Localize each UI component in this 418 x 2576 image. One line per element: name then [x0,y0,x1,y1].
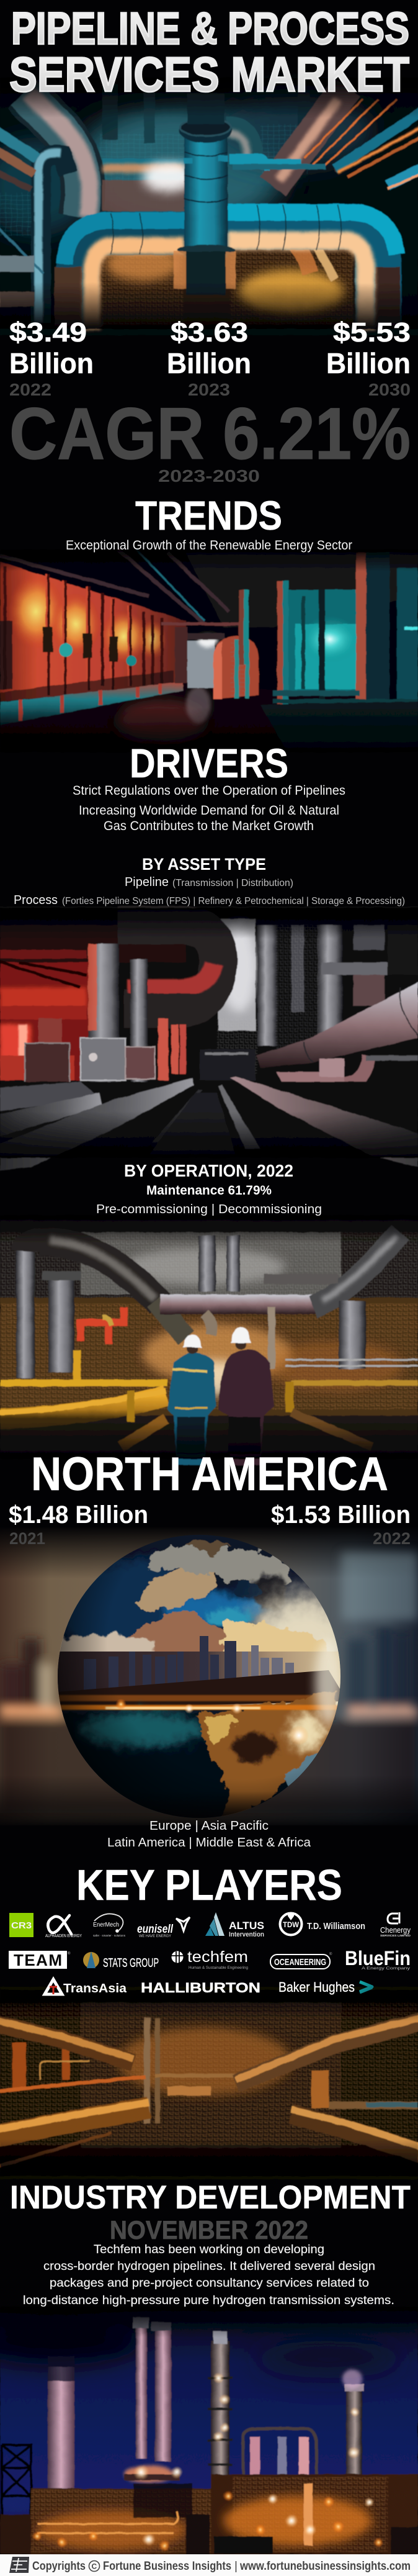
stacks [48,2367,74,2490]
logo: eunisell: WE HAVE ENERGY [139,1935,171,1938]
heading: drivers: DRIVERS [130,740,288,786]
left small pipe [41,155,68,323]
segment: by asset type: (Forties Pipeline System (FPS) | Refinery & Petrochemical | Storage & Processing) [62,896,405,906]
plant [31,2488,211,2554]
logo: Chenergy: SERVICES LIMITED [380,1934,411,1937]
glow behind the column [102,180,186,211]
logo: techfem [171,1948,248,1970]
stat: 2030 market size: 2030 [368,380,411,399]
curved large pipe [118,925,218,1009]
logo: Altus Intervention: ALTUS [229,1920,264,1932]
stat: 2030 market size: Billion [326,347,411,379]
logo: BlueFin: BlueFin [345,1947,411,1969]
stat: north america 2021 [9,1501,148,1548]
footer bar: | [234,2560,238,2573]
europe land [136,1567,216,1612]
pillars [88,944,119,1099]
skyline [58,1652,343,1706]
logo: Altus Intervention: Intervention [229,1931,264,1938]
logo: Stats Group [83,1951,159,1970]
logo: AlphaAden Energy: ALPHAADEN ENERGY [45,1933,82,1938]
image: refinery with two workers [0,1215,418,1465]
right lower pipes [291,2114,418,2153]
logo: T.D. Williamson [280,1912,365,1935]
heading: drivers: Strict Regulations over the Operation of Pipelines [73,784,345,798]
truss [2,2445,31,2554]
logo: Oceaneering [270,1952,332,1969]
CAGR figure: 2023-2030 [158,466,260,486]
background elbow behind column [226,127,252,161]
segment: by asset type: (Transmission | Distribution) [172,878,293,888]
logo: BlueFin: A Energy Company [362,1967,410,1971]
red elbow pipes [81,1307,124,1344]
red area left [0,962,93,1080]
image: refinery at night [0,2307,418,2554]
heading: drivers: Gas Contributes to the Market Growth [104,819,314,833]
plant lights [133,2464,149,2480]
logo: EnerMech: EnerMech [93,1922,119,1928]
ceiling beams [0,549,229,624]
image: blurred city behind globe [0,1526,418,1828]
icon: globe with city skyline [58,1535,340,1818]
segment: by asset type: BY ASSET TYPE [142,855,266,874]
stat: 2023 market size [167,317,251,399]
logo: TEAM: TEAM [14,1951,62,1969]
big right pipe and elbow [228,227,378,329]
icon: Fortune Business Insights logo [9,2557,29,2573]
grey pipe network [16,1248,35,1378]
stat: 2022 market size [9,317,94,399]
desert band [127,1609,227,1652]
text: industry development description: packages and pre-project consultancy services related to [50,2277,369,2290]
segment: by operation: BY OPERATION, 2022 [124,1161,293,1180]
logo: EnerMech [93,1914,126,1937]
segment: by operation: Pre-commissioning | Decommissioning [96,1203,322,1216]
right upper pipe [236,2022,418,2084]
logo: TEAM: ® [68,1951,71,1956]
footer bar [0,2554,418,2576]
segment: by asset type [14,855,405,907]
image: pump room red and teal [0,549,418,752]
text: industry development description: Techfem has been working on developing [94,2243,324,2256]
heading: drivers [73,740,345,833]
converging floor pipes [0,1082,418,1156]
stat: north america 2022: $1.53 Billion [271,1501,411,1529]
stat: north america 2021: 2021 [9,1529,45,1548]
logo: techfem: techfem [187,1948,248,1966]
heading: north america: NORTH AMERICA [31,1448,388,1501]
image: red and steel pipe corridor [0,906,418,1170]
other regions list: Latin America | Middle East & Africa [107,1836,311,1850]
stat: north america 2022 [271,1501,411,1548]
heading: trends: TRENDS [135,492,282,538]
segment: by asset type: Process [14,893,58,907]
logo: eunisell: eunisell [137,1923,174,1936]
title [9,4,409,102]
left lower pipe [0,2108,149,2136]
logo: Baker Hughes: Baker Hughes [278,1979,355,1995]
text: industry development description: cross-border hydrogen pipelines. It delivered several design [43,2260,375,2273]
pale sky centre [218,919,256,1031]
orange machinery beneath [93,248,354,329]
logo: TransAsia [45,1979,127,1995]
logo: eunisell [137,1917,190,1938]
other regions list [107,1819,311,1850]
glowing horizon [59,1705,338,1710]
right side towers [257,925,277,1046]
floor [0,683,418,751]
stat: 2023 market size: Billion [167,347,251,379]
logo: CR3: CR3 [11,1920,32,1931]
heading: drivers: Increasing Worldwide Demand for Oil & Natural [79,803,339,818]
stat: 2022 market size: 2022 [9,380,51,399]
central column [184,130,228,258]
worker: brown jacket [218,1349,274,1465]
stat: 2023 market size: 2023 [188,380,230,399]
logo: Altus Intervention [205,1912,264,1938]
segment: by operation [96,1161,322,1216]
text: industry development description [23,2243,394,2307]
red wall [0,562,186,705]
logo: Chenergy [380,1912,411,1937]
heading: industry development: NOVEMBER 2022 [110,2215,308,2244]
logo: T.D. Williamson: T.D. Williamson [307,1921,365,1932]
logo: AlphaAden Energy [45,1915,82,1938]
footer bar: Fortune Business Insights [103,2560,231,2573]
image: hero industrial pipelines [0,78,418,335]
fade hero out to black [0,78,418,118]
heading: trends: Exceptional Growth of the Renewable Energy Sector [66,538,352,553]
stat: north america 2022: 2022 [373,1529,411,1548]
segment: by asset type: Pipeline [125,875,169,889]
right big pipe [256,982,418,1068]
other regions list: Europe | Asia Pacific [149,1819,269,1833]
door [175,627,187,683]
wall risers [5,566,162,695]
left diagonal pipes [0,130,37,158]
footer bar: Copyrights [32,2560,86,2573]
logo: TransAsia: TransAsia [63,1982,127,1995]
lower hemisphere [63,1690,337,1816]
segment: by operation: Maintenance 61.79% [146,1183,272,1198]
text: industry development description: long-distance high-pressure pure hydrogen transmission systems. [23,2294,394,2307]
worker: blue jacket [167,1352,216,1465]
teal room [288,590,357,692]
stat: north america 2021: $1.48 Billion [9,1501,148,1529]
logo: EnerMech: safer · smarter · solutions [93,1934,126,1937]
logo: Stats Group: STATS GROUP [103,1956,159,1970]
stat: 2023 market size: $3.63 [171,317,248,348]
logo: Chenergy: Chenergy [380,1925,411,1935]
right diagonal pipes [273,87,347,186]
stat: 2030 market size: $5.53 [333,317,411,348]
logo: T.D. Williamson: TDW [283,1920,300,1929]
lit limb [248,1593,360,1686]
heading: industry development [10,2179,411,2244]
image: copper refinery pipes [0,1987,418,2179]
large grey pipe left [24,93,83,217]
big left pipe and elbow [78,233,184,329]
red tank [213,636,259,699]
pipe bridge [243,2429,316,2490]
heading: key players: KEY PLAYERS [76,1861,342,1909]
stat: 2022 market size: Billion [9,347,94,379]
logo: CR3 [9,1913,33,1937]
yellow railings [73,1350,81,1385]
logo: Oceaneering: OCEANEERING [274,1957,326,1968]
logo: Oceaneering: ® [329,1952,332,1956]
footer bar: C [92,2562,97,2570]
floor pipe [0,682,184,725]
heading: trends [66,492,352,553]
logo: techfem: Human & Sustainable Engineering [189,1966,248,1970]
logo: Halliburton: HALLIBURTON [141,1980,260,1995]
stat: 2030 market size [326,317,411,399]
stat: 2022 market size: $3.49 [9,317,87,348]
left upper pipe [0,2024,133,2063]
